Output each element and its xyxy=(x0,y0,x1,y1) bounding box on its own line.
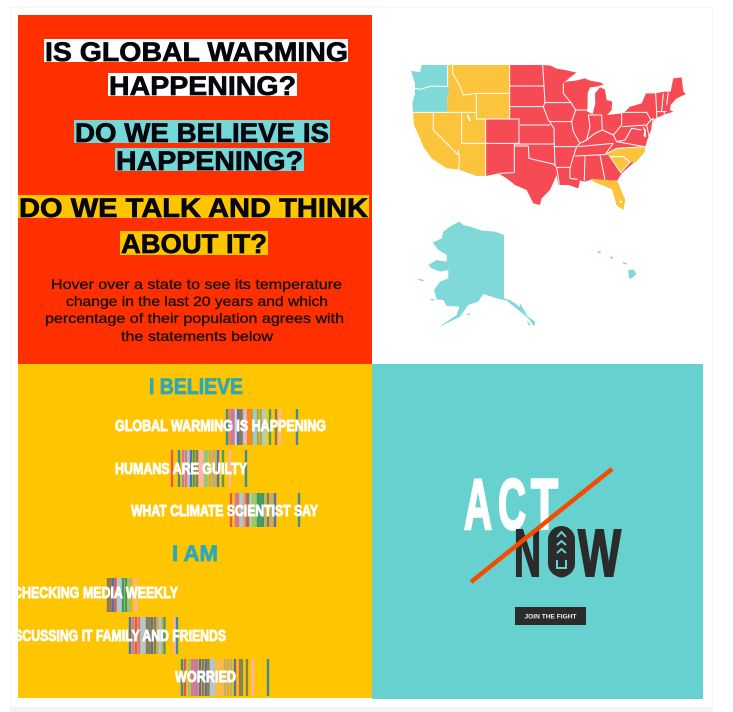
yellow states xyxy=(413,65,510,176)
heading: do we talk and think about it: DO WE TALK AND THINK xyxy=(19,193,369,223)
heading: do we talk and think about it xyxy=(18,193,369,259)
row: global warming is happening: GLOBAL WARMING IS HAPPENING xyxy=(115,418,326,435)
row: discussing it family and friends: DISCUSSING IT FAMILY AND FRIENDS xyxy=(2,628,226,645)
panel: act now xyxy=(372,364,703,699)
icon: O with chevrons xyxy=(548,526,575,577)
instructions text: percentage of their population agrees with xyxy=(45,310,344,326)
row: global warming is happening xyxy=(115,409,326,445)
row: humans are guilty: HUMANS ARE GUILTY xyxy=(115,461,248,478)
heading: I believe: I BELIEVE xyxy=(149,374,243,399)
row: humans are guilty xyxy=(115,450,248,487)
row: worried xyxy=(175,659,268,696)
map: contiguous US states xyxy=(411,65,686,210)
map: Alaska and Hawaii xyxy=(417,222,637,327)
instructions text xyxy=(45,276,344,344)
heading: is global warming happening xyxy=(44,37,348,101)
instructions text: Hover over a state to see its temperature xyxy=(51,276,342,292)
row: what climate scientist say xyxy=(131,493,319,527)
panel: statements xyxy=(2,364,372,698)
row: discussing it family and friends xyxy=(2,617,226,654)
Hawaii xyxy=(598,251,637,278)
logo text: NOW: W xyxy=(578,516,622,591)
Alaska islands xyxy=(417,278,531,326)
state borders xyxy=(413,65,670,185)
heading: I am: I AM xyxy=(172,541,218,566)
row: what climate scientist say: WHAT CLIMATE SCIENTIST SAY xyxy=(131,503,319,520)
chesapeake bay xyxy=(643,126,646,137)
logo text: ACT: T xyxy=(531,466,558,545)
panel: questions xyxy=(18,15,372,364)
row: checking media weekly: CHECKING MEDIA WEEKLY xyxy=(13,585,179,602)
great salt lake xyxy=(467,114,471,122)
button: join the fight xyxy=(515,607,586,625)
logo text: ACT: A xyxy=(464,466,492,545)
heading: is global warming happening: IS GLOBAL WARMING xyxy=(45,37,348,67)
instructions text: the statements below xyxy=(121,328,274,344)
heading: do we believe is happening: HAPPENING? xyxy=(116,146,303,176)
heading: do we talk and think about it: ABOUT IT? xyxy=(121,229,267,259)
logo text: NOW: O xyxy=(548,516,575,591)
teal states xyxy=(411,65,450,112)
florida lake xyxy=(620,200,622,203)
logo text: ACT: C xyxy=(498,466,526,545)
row: worried: WORRIED xyxy=(175,669,236,686)
logo text: NOW: N xyxy=(514,516,541,591)
slash line xyxy=(471,469,612,582)
button: join the fight: JOIN THE FIGHT xyxy=(524,614,577,620)
heading: do we believe is happening xyxy=(74,118,330,176)
row: checking media weekly xyxy=(13,578,179,612)
heading: do we believe is happening: DO WE BELIEVE IS xyxy=(75,118,329,148)
Alaska xyxy=(428,222,535,327)
instructions text: change in the last 20 years and which xyxy=(66,293,328,309)
red states xyxy=(486,65,686,205)
heading: is global warming happening: HAPPENING? xyxy=(109,71,296,101)
